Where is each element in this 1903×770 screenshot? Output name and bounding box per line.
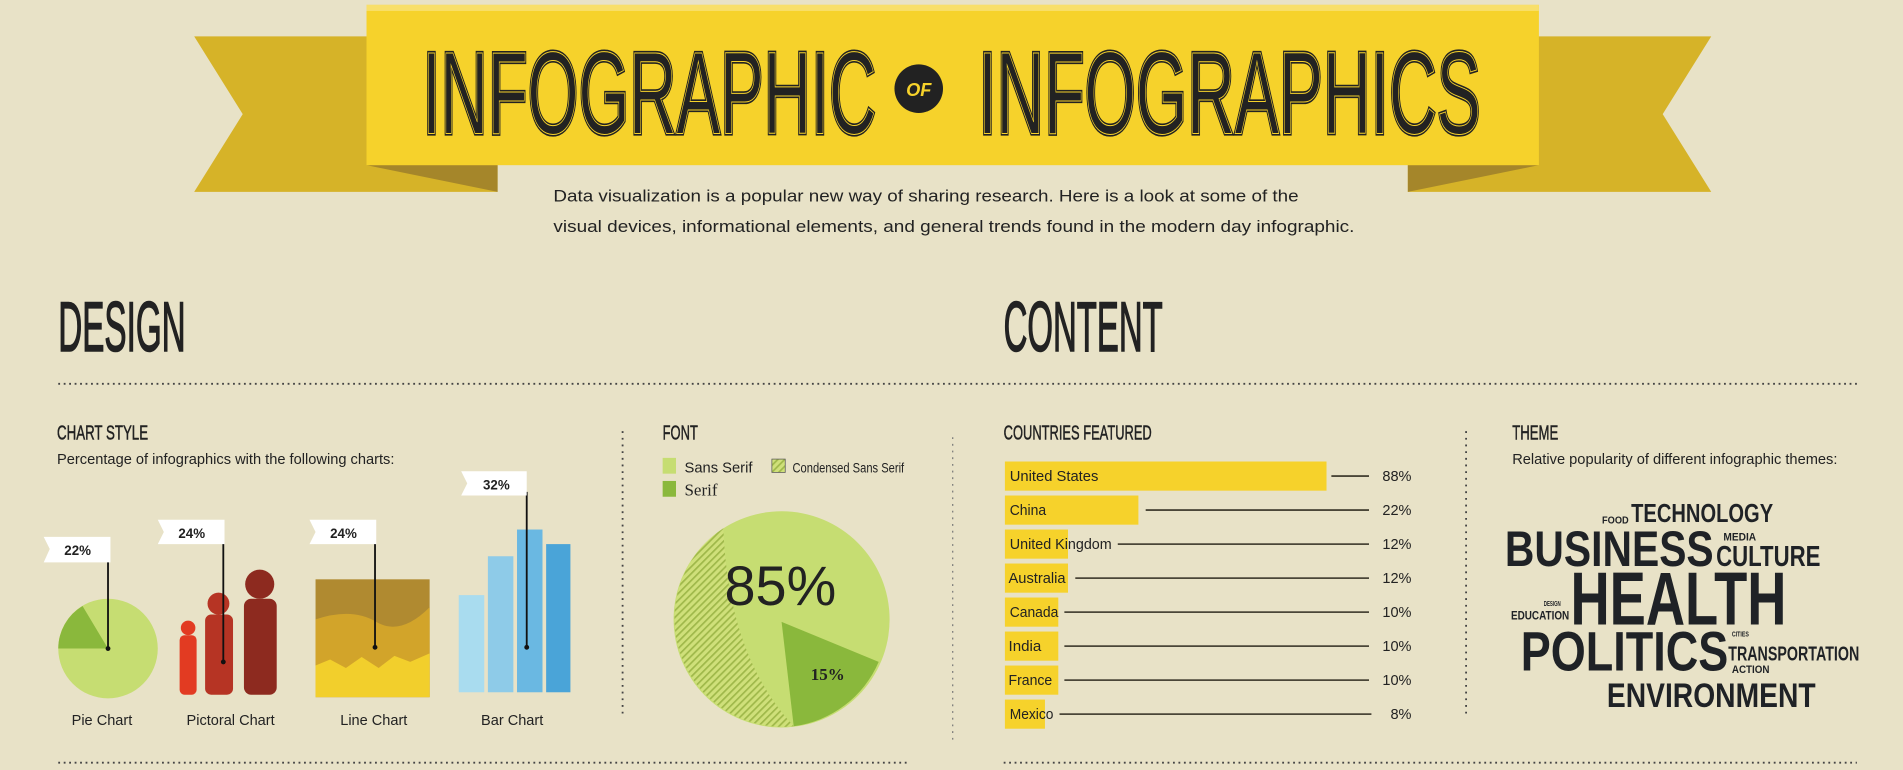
- text: DESIGN: [58, 287, 186, 366]
- panel: countries featured: 12%: [1382, 537, 1412, 553]
- chart labels: Line Chart: [340, 713, 407, 729]
- panel: countries featured: 10%: [1382, 639, 1412, 655]
- word cloud: CITIES: [1732, 629, 1749, 638]
- pie chart icon: 22%: [64, 543, 91, 558]
- panel: countries featured: China: [1010, 503, 1047, 519]
- bar chart icon: 32%: [483, 477, 510, 492]
- word cloud: ACTION: [1732, 664, 1770, 676]
- line chart icon: [309, 520, 430, 697]
- panel: countries featured: Australia: [1009, 571, 1066, 587]
- word cloud: HEALTH: [1570, 556, 1786, 640]
- word cloud: ENVIRONMENT: [1607, 677, 1816, 715]
- panel: theme: [1505, 422, 1859, 715]
- pictoral chart icon: [158, 520, 277, 695]
- legend: Sans Serif: [684, 460, 753, 476]
- word cloud: [1505, 500, 1859, 715]
- panel: countries featured: 10%: [1382, 673, 1412, 689]
- subtitle: Data visualization is a popular new way of sharing research. Here is a look at some of the: [553, 187, 1299, 206]
- legend: [663, 458, 904, 500]
- panel: countries featured: France: [1009, 673, 1052, 689]
- pictoral chart icon: 24%: [178, 526, 205, 541]
- word cloud: DESIGN: [1544, 599, 1561, 608]
- word cloud: CULTURE: [1716, 541, 1820, 573]
- panel: font: FONT: [663, 422, 698, 445]
- panel: countries featured: 8%: [1390, 707, 1412, 723]
- title: INFOGRAPHICS: [978, 28, 1481, 159]
- panel: chart style: CHART STYLE: [57, 422, 148, 445]
- title: INFOGRAPHIC: [422, 28, 876, 159]
- word cloud: BUSINESS: [1505, 521, 1714, 577]
- panel: theme: Relative popularity of different infographic themes:: [1512, 452, 1837, 468]
- panel: countries featured: COUNTRIES FEATURED: [1004, 422, 1152, 445]
- word cloud: EDUCATION: [1511, 608, 1569, 622]
- word cloud: FOOD: [1602, 515, 1629, 526]
- panel: countries featured: Canada: [1010, 605, 1059, 621]
- panel: countries featured: United Kingdom: [1010, 537, 1112, 553]
- panel: countries featured: United States: [1010, 469, 1098, 485]
- panel: countries featured: [1004, 422, 1412, 729]
- title: INFOGRAPHIC: [422, 28, 876, 159]
- word cloud: TECHNOLOGY: [1631, 500, 1773, 528]
- font pie chart: 15%: [811, 665, 845, 684]
- subtitle: [553, 187, 1354, 236]
- panel: chart style: Percentage of infographics with the following charts:: [57, 452, 394, 468]
- title: INFOGRAPHICS: [978, 28, 1481, 159]
- panel: font: [663, 422, 904, 727]
- chart labels: [72, 713, 543, 729]
- chart labels: Bar Chart: [481, 713, 543, 729]
- panel: countries featured: 22%: [1382, 503, 1412, 519]
- legend: Condensed Sans Serif: [793, 460, 904, 475]
- line chart icon: 24%: [330, 526, 357, 541]
- panel: countries featured: 12%: [1382, 571, 1412, 587]
- bar chart icon: [459, 471, 570, 692]
- panel: countries featured: Mexico: [1010, 707, 1053, 723]
- font pie chart: [674, 511, 890, 727]
- panel: chart style: [44, 422, 570, 729]
- panel: countries featured: 10%: [1382, 605, 1412, 621]
- panel: countries featured: 88%: [1382, 469, 1412, 485]
- legend: Serif: [684, 481, 718, 500]
- font pie chart: 85%: [725, 554, 836, 617]
- banner ribbon: [194, 5, 1711, 192]
- chart labels: Pie Chart: [72, 713, 132, 729]
- subtitle: visual devices, informational elements, and general trends found in the modern day infographic.: [553, 217, 1354, 236]
- chart labels: Pictoral Chart: [187, 713, 275, 729]
- word cloud: MEDIA: [1723, 531, 1756, 543]
- panel: theme: THEME: [1512, 422, 1558, 445]
- text: CONTENT: [1004, 287, 1163, 366]
- word cloud: POLITICS: [1521, 619, 1728, 682]
- panel: countries featured: India: [1009, 639, 1042, 655]
- title: OF: [906, 80, 932, 100]
- pie chart icon: [44, 537, 158, 698]
